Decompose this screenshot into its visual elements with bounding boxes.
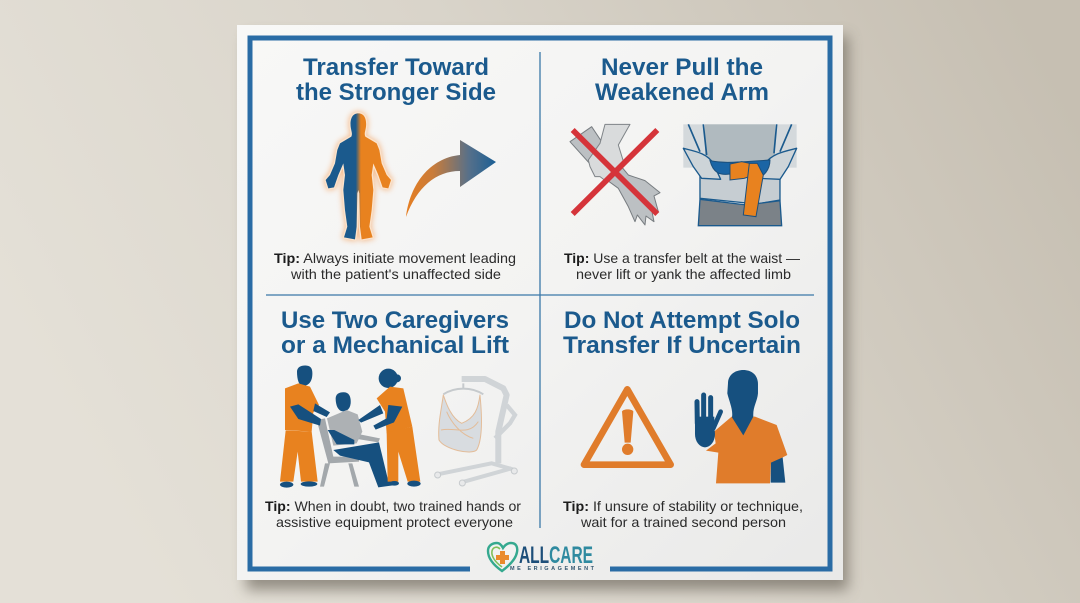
tip text	[265, 498, 521, 530]
tip text: Tip: Always initiate movement leading	[274, 250, 516, 266]
tip text	[274, 250, 516, 282]
icon: logo heart with cross	[488, 543, 517, 571]
tip text	[564, 250, 800, 282]
heading: transfer toward	[296, 54, 496, 106]
heading: do not attempt solo	[563, 307, 801, 359]
heading: use two caregivers: Use Two Caregivers	[281, 307, 509, 334]
arrow: toward stronger side	[406, 140, 496, 217]
panel: do not attempt solo transfer	[563, 307, 803, 530]
blue frame	[250, 38, 830, 569]
tip text: Tip: Use a transfer belt at the waist —	[564, 250, 800, 266]
icon: body split blue and orange	[326, 113, 391, 239]
icon: transfer belt at waist	[683, 124, 797, 226]
tip text: assistive equipment protect everyone	[276, 514, 513, 530]
tip text	[563, 498, 803, 530]
panel: two caregivers or a mechanical lift	[265, 307, 521, 530]
logo: AllCare	[488, 542, 595, 572]
tip text: with the patient's unaffected side	[290, 266, 501, 282]
panel: transfer toward the stronger side	[274, 54, 516, 282]
heading: never pull: Never Pull the	[601, 54, 763, 81]
tip text: Tip: When in doubt, two trained hands or	[265, 498, 521, 514]
heading: do not attempt solo: Do Not Attempt Solo	[564, 307, 800, 334]
heading: use two caregivers: or a Mechanical Lift	[281, 332, 509, 359]
heading: never pull: Weakened Arm	[595, 79, 769, 106]
poster shadow	[246, 36, 848, 590]
icon: crossed out arm pull	[570, 124, 660, 225]
heading: transfer toward: the Stronger Side	[296, 79, 496, 106]
heading: never pull	[595, 54, 769, 106]
logo wordmark: ALLCARE	[519, 542, 593, 569]
heading: do not attempt solo: Transfer If Uncertain	[563, 332, 801, 359]
tip text: never lift or yank the affected limb	[576, 266, 791, 282]
poster sheet	[237, 25, 843, 580]
heading: use two caregivers	[281, 307, 509, 359]
icon: mechanical lift with sling	[435, 379, 517, 486]
heading: transfer toward: Transfer Toward	[303, 54, 489, 81]
panel: never pull the weakened arm	[564, 54, 800, 282]
tip text: Tip: If unsure of stability or technique,	[563, 498, 803, 514]
logo tagline: ME ERIGAGEMENT	[510, 566, 595, 572]
icon: warning triangle	[584, 389, 671, 465]
icon: two caregivers helping seated patient	[280, 366, 421, 488]
icon: caregiver raising stop hand	[695, 370, 787, 483]
tip text: wait for a trained second person	[580, 514, 786, 530]
